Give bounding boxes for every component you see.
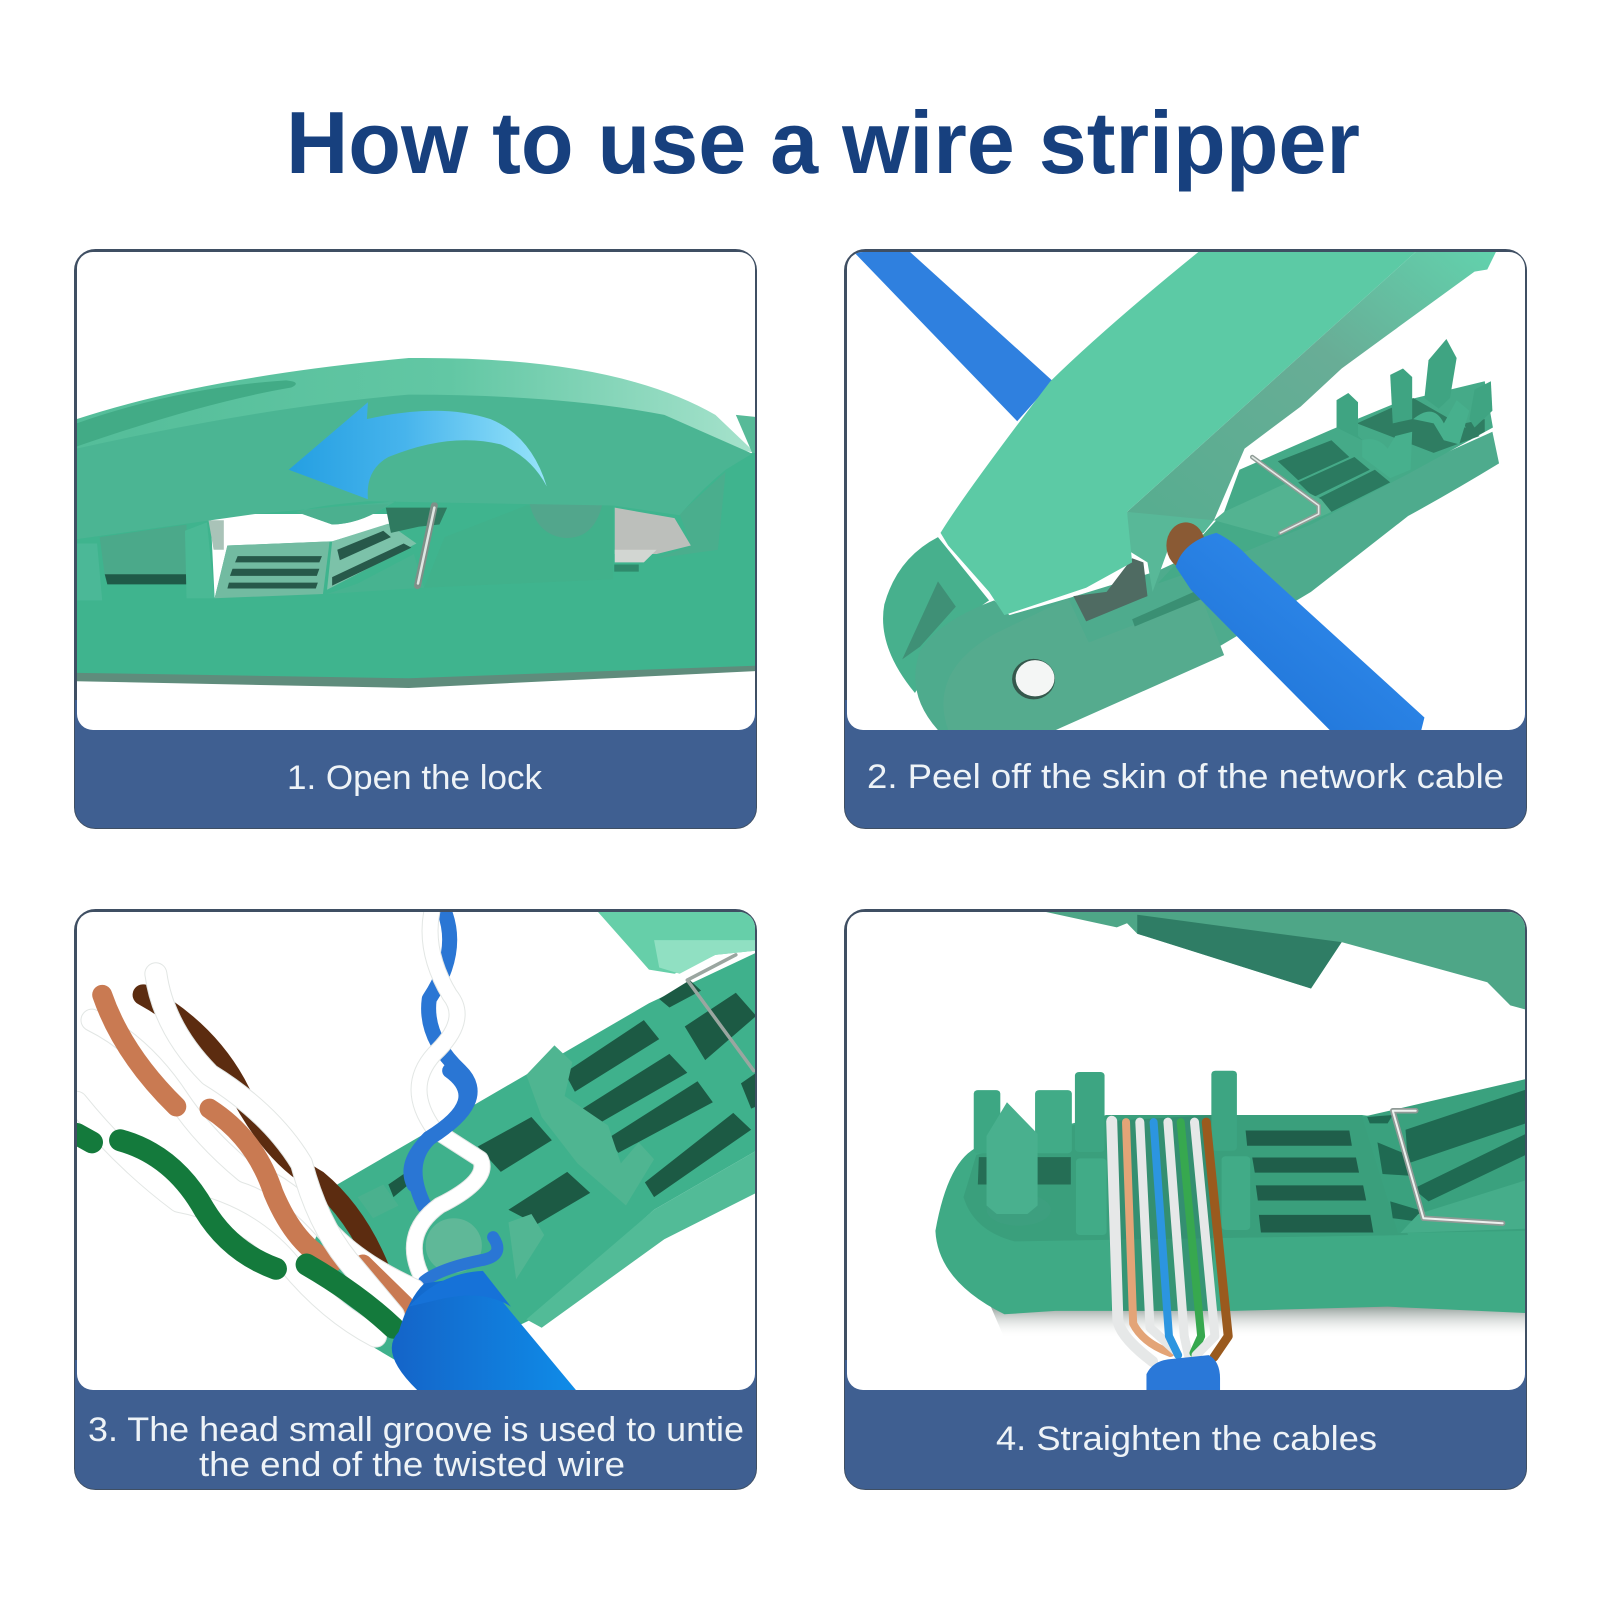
caption: step 3 — [75, 1360, 756, 1489]
caption: step 3: the end of the twisted wire — [199, 1446, 625, 1484]
illustration: stripper with blue cable — [854, 252, 1499, 732]
illustration: twisted wire pairs on the stripper — [77, 912, 756, 1392]
card frame — [846, 250, 1526, 828]
caption: step 4: 4. Straighten the cables — [996, 1420, 1377, 1458]
card frame — [76, 250, 756, 828]
card frame — [846, 910, 1526, 1488]
illustration: stripper side view with lock — [77, 358, 756, 688]
arrow: blue curved arrow — [289, 402, 547, 499]
caption: step 4 — [845, 1360, 1526, 1489]
caption: step 1 — [75, 700, 756, 828]
panel: step 3 untie twisted wire — [75, 910, 756, 1489]
panel: step 2 peel the cable — [845, 250, 1526, 828]
panel: step 4 straighten the cables — [845, 910, 1526, 1489]
illustration: stripper tray with straightened wires — [935, 912, 1526, 1392]
caption: step 2 — [845, 700, 1526, 828]
caption: step 3: 3. The head small groove is used to untie — [88, 1411, 744, 1449]
card frame — [76, 910, 756, 1488]
title: How to use a wire stripper — [286, 93, 1360, 192]
panel: step 1 open the lock — [75, 250, 756, 828]
caption: step 2: 2. Peel off the skin of the network cable — [867, 758, 1504, 796]
caption: step 1: 1. Open the lock — [287, 759, 543, 797]
